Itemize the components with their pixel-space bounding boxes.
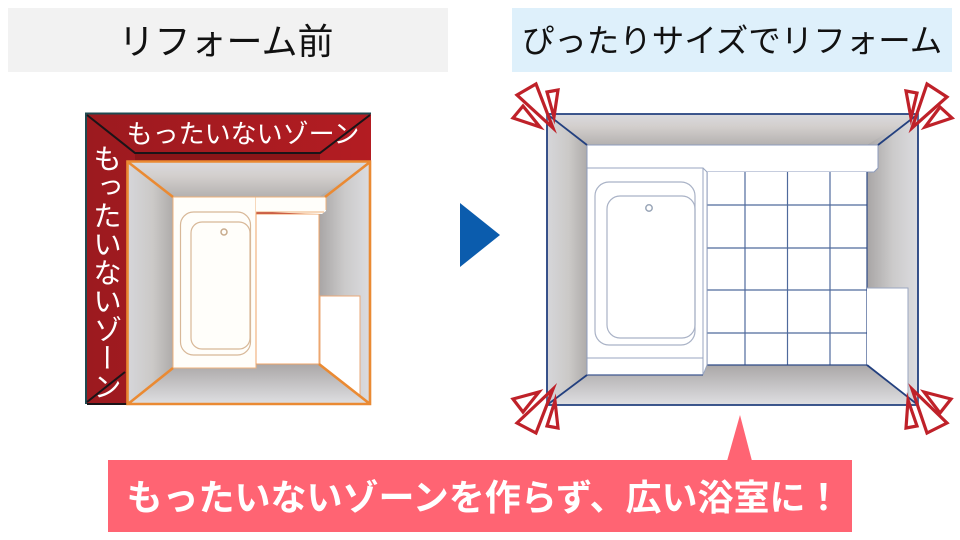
heading: before reform: リフォーム前	[119, 21, 333, 62]
heading: before reform	[8, 8, 448, 72]
label: wasted zone vertical: もったいないゾーン	[89, 144, 121, 400]
bathtub before reform	[173, 197, 256, 368]
counter before reform	[320, 296, 360, 396]
panel: floor plan after reform	[513, 84, 952, 433]
callout: もったいないゾーンを作らず、広い浴室に！	[127, 477, 841, 518]
walls before reform	[128, 162, 370, 404]
navy room outline	[547, 114, 918, 405]
top shelf after reform	[587, 145, 878, 172]
burst: bottom left corner	[513, 389, 558, 433]
label: wasted zone horizontal: もったいないゾーン	[127, 119, 359, 149]
arrow	[460, 203, 500, 267]
heading: perfect size reform	[512, 8, 952, 72]
bathtub after reform	[587, 145, 707, 375]
counter after reform	[867, 288, 908, 398]
orange room outline	[128, 162, 370, 404]
wash area floor and shelf before reform	[256, 197, 326, 364]
burst: top right corner	[906, 84, 952, 128]
burst: top left corner	[513, 84, 558, 128]
walls after reform	[547, 114, 918, 405]
burst: bottom right corner	[906, 389, 951, 433]
tile floor	[707, 172, 867, 365]
heading: perfect size reform: ぴったりサイズでリフォーム	[522, 23, 942, 59]
panel: floor plan before reform	[86, 114, 371, 404]
callout	[108, 415, 852, 532]
wasted zone band	[86, 114, 371, 404]
